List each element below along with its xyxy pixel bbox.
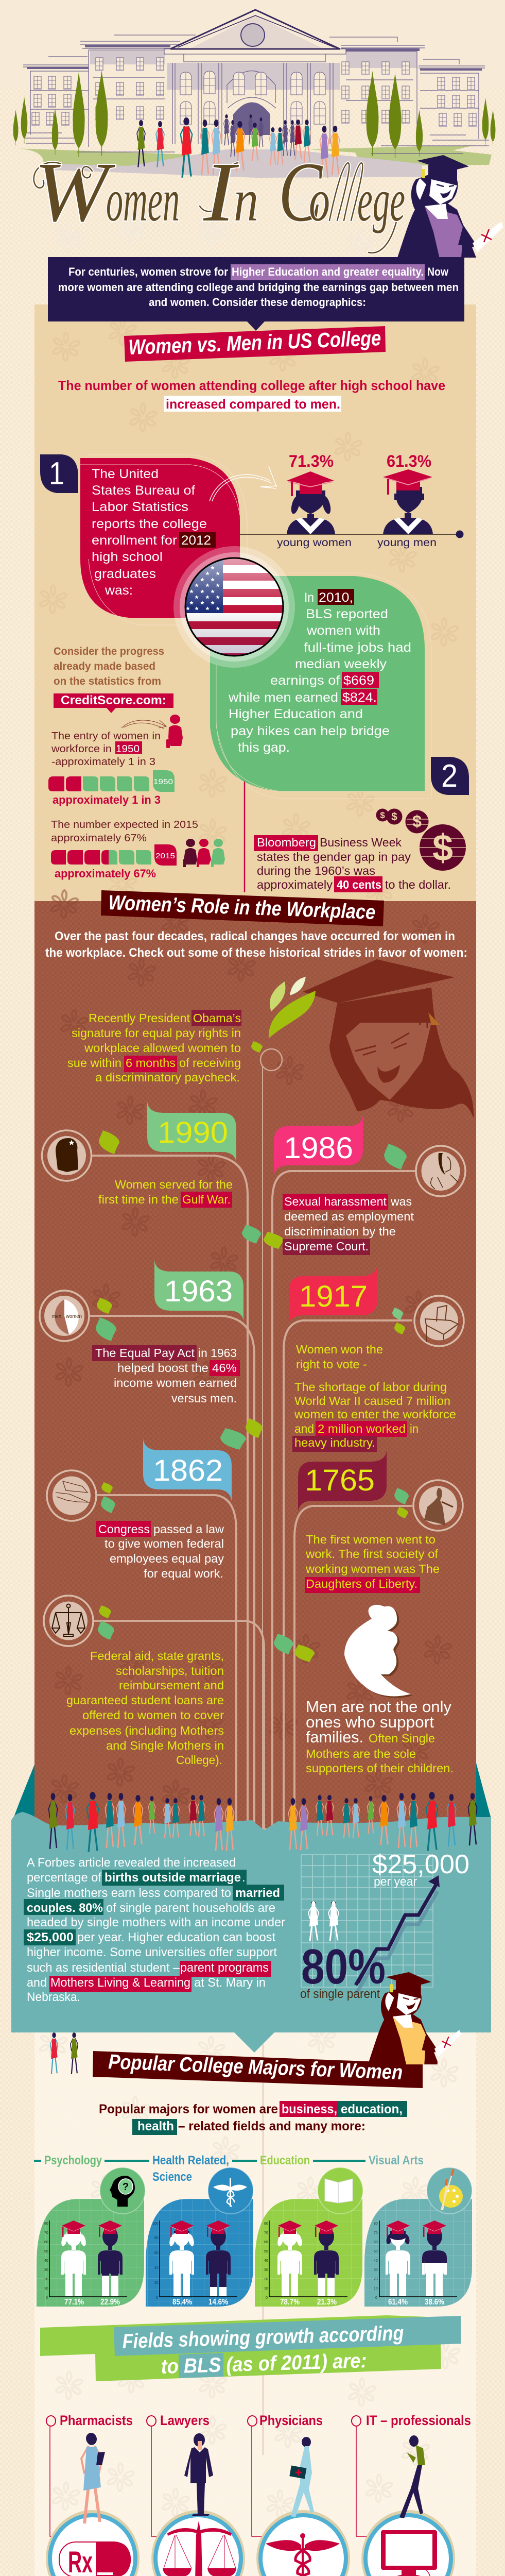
figures: [386, 2221, 447, 2296]
bar axis: 50: [264, 2250, 268, 2253]
bar axis: [44, 2221, 127, 2300]
timeline: 1990: Gulf War.: [182, 1193, 231, 1206]
heading: fields showing growth: to BLS (as of 2011) are:: [161, 2349, 367, 2378]
icon: dollar coins: $: [380, 810, 385, 820]
text: Bloomberg gender gap: states the gender gap in pay: [257, 850, 411, 863]
major headings row: Psychology: [44, 2154, 102, 2167]
bar axis: 40: [264, 2259, 268, 2263]
bar axis: 20: [154, 2281, 159, 2285]
text: workplace intro: [45, 929, 467, 960]
panel 2: earnings: $824.: [342, 690, 377, 705]
icon: money in hand: [47, 1470, 96, 1521]
timeline: 1917: 1917: [299, 1280, 368, 1313]
panel 2: earnings: BLS reported: [306, 607, 388, 621]
timeline: 1963: 1963: [164, 1275, 233, 1308]
bar axis: 10: [264, 2287, 268, 2291]
title graduate illustration: [396, 155, 503, 265]
text: Obama equal pay: of receiving: [179, 1056, 241, 1070]
text: Obama equal pay: signature for equal pay rights in: [72, 1026, 241, 1040]
icon: US flag: [173, 546, 295, 668]
arrow: to graduates: [210, 466, 277, 501]
text: federal aid: [66, 1649, 224, 1767]
subheading: number of women attending: The number of women attending college after high school have: [58, 378, 445, 393]
major headings row: [34, 2154, 424, 2184]
figures: [276, 2221, 339, 2296]
timeline: 1862: passed a law: [153, 1522, 224, 1536]
text: Bloomberg gender gap: Bloomberg: [257, 836, 316, 849]
bar axis: 20: [44, 2278, 48, 2281]
panel 2: earnings: Higher Education and: [229, 707, 363, 721]
bar axis: 60: [154, 2251, 159, 2255]
icon: dollar coins: [376, 809, 466, 871]
bar axis: 0: [156, 2296, 158, 2300]
panel: psychology: 22.9%: [100, 2298, 120, 2307]
two students walking: [50, 2032, 78, 2074]
text: Forbes article: Mothers Living & Learning: [50, 1976, 190, 1990]
major headings row: Health Related,: [152, 2154, 229, 2167]
text: Forbes article: [24, 1856, 285, 2004]
chart: young women vs young men: young men: [377, 537, 437, 549]
timeline: 1862: employees equal pay: [110, 1552, 224, 1565]
major headings row: Visual Arts: [369, 2154, 424, 2167]
panel 2: earnings: pay hikes can help bridge: [231, 724, 390, 738]
text: Bloomberg gender gap: 40 cents: [337, 878, 381, 891]
panel: single parents: [11, 1763, 491, 2053]
stat: women in workforce 1950: The entry of women in: [51, 731, 161, 742]
timeline: 1862: [47, 1438, 232, 1580]
bar axis: 60: [374, 2241, 378, 2244]
text: Obama equal pay: sue within: [67, 1056, 121, 1070]
title: o: [309, 166, 330, 234]
panel 2: earnings: $669: [343, 673, 374, 688]
field: lawyers: Lawyers: [160, 2413, 210, 2428]
panel 1: college enrollment: reports the college: [92, 517, 207, 531]
bar axis: 0: [46, 2296, 48, 2300]
text: Forbes article: and: [27, 1976, 47, 1990]
title: I: [203, 145, 239, 239]
text: federal aid: College).: [176, 1753, 222, 1767]
chart: income growth: of single parent: [300, 1987, 380, 2001]
panel 1: college enrollment: States Bureau of: [92, 483, 195, 498]
heading: women vs men: Women vs. Men in US College: [128, 326, 381, 359]
text: workplace intro: the workplace. Check out some of these historical strides in favor of women:: [45, 946, 467, 960]
timeline: 1765: Daughters of Liberty.: [306, 1577, 417, 1590]
text: Forbes article: such as residential student –: [27, 1961, 180, 1975]
panel 1: college enrollment: enrollment for: [92, 533, 177, 548]
stat: women in workforce 2015: 2015: [155, 852, 175, 860]
icon: men women pie: [40, 1291, 89, 1341]
title: W: [34, 145, 115, 239]
bar axis: 60: [264, 2241, 268, 2244]
timeline: 1917: The shortage of labor during: [294, 1380, 447, 1394]
timeline: 1986: 1986: [284, 1131, 353, 1165]
timeline: 1963: income women earned: [114, 1376, 237, 1389]
timeline: 1986: discrimination by the: [284, 1225, 396, 1238]
icon: scales of justice: [44, 1596, 93, 1646]
intro callout box: more women are attending college and bridging the earnings gap between men: [58, 281, 459, 294]
text: federal aid: scholarships, tuition: [116, 1664, 224, 1677]
title: omen: [106, 166, 180, 234]
stat: women in workforce 1950: -approximately 1 in 3: [51, 756, 155, 768]
timeline: 1990: Women served for the: [115, 1178, 233, 1191]
panel 1: college enrollment: Labor Statistics: [92, 500, 188, 514]
panel: psychology: 77.1%: [64, 2298, 84, 2307]
stat: women in workforce 1950: workforce in: [51, 743, 112, 755]
stat: women in workforce 1950: [48, 731, 175, 806]
text: federal aid: Federal aid, state grants,: [90, 1649, 224, 1663]
chart: income growth: 80%: [301, 1939, 386, 1994]
bar axis: 30: [374, 2268, 378, 2272]
bar axis: 0: [266, 2296, 268, 2300]
text: Obama equal pay: Recently President: [89, 1011, 190, 1025]
icon: soldier woman: [42, 1130, 92, 1181]
bar axis: 80: [44, 2222, 48, 2226]
title: [34, 145, 405, 253]
text: federal aid: expenses (including Mothers: [69, 1724, 224, 1737]
bar axis: 50: [44, 2250, 48, 2253]
timeline: 1917: and: [294, 1422, 314, 1435]
text: Forbes article: parent programs: [180, 1961, 269, 1975]
icon: dollar coins: $: [412, 812, 422, 831]
text: federal aid: reimbursement and: [119, 1679, 224, 1692]
bar axis: 100: [152, 2222, 159, 2226]
heading: fields showing growth: Fields showing growth according: [122, 2322, 404, 2353]
heading: popular college majors: Popular College Majors for Women: [108, 2050, 403, 2084]
chart: young women vs young men: young women: [277, 537, 352, 549]
chart: income growth: [300, 1850, 469, 2001]
bar axis: [374, 2221, 457, 2300]
icon: head with question mark: [110, 2176, 135, 2207]
bar axis: [152, 2221, 237, 2300]
timeline: 1862: 1862: [153, 1454, 223, 1487]
panel: workplace background: [34, 901, 476, 1828]
text: Forbes article: $25,000: [27, 1930, 74, 1944]
text: Bloomberg gender gap: Business Week: [320, 836, 402, 849]
timeline: 1917: in: [410, 1422, 419, 1435]
leaves: [96, 977, 409, 1662]
figures: [60, 2221, 123, 2296]
field: pharmacists: Pharmacists: [60, 2413, 133, 2428]
timeline: 1765: The first women went to: [306, 1533, 436, 1546]
text: Forbes article: at St. Mary in: [194, 1976, 266, 1990]
timeline: 1963: 46%: [212, 1361, 237, 1375]
badge 2: 2: [441, 758, 458, 794]
field: physicians: Physicians: [259, 2413, 323, 2428]
intro callout box: [48, 257, 464, 331]
panel: health: 14.6%: [208, 2298, 228, 2307]
major headings row: Science: [152, 2170, 192, 2184]
stat: women in workforce 1950: 1950: [153, 777, 173, 786]
field: IT professionals: [352, 2413, 471, 2576]
text: Forbes article: percentage of: [27, 1871, 101, 1885]
intro callout box: For centuries, women strove for: [68, 265, 228, 278]
figure: IT professional: [399, 2435, 425, 2518]
text: Bloomberg gender gap: approximately: [257, 878, 333, 891]
panel 1: college enrollment: 2012: [181, 533, 211, 548]
icon: mother and child silhouette: [344, 1605, 413, 1698]
timeline: 1862: to give women federal: [105, 1537, 224, 1550]
stats: CreditScore progress intro: on the statistics from: [54, 675, 161, 687]
bar axis: 30: [44, 2268, 48, 2272]
chart: young women vs young men: 61.3%: [387, 452, 431, 470]
timeline: 1986: was: [390, 1195, 412, 1208]
stat: women in workforce 2015: approximately 67%: [55, 867, 156, 880]
badge 1: [40, 454, 78, 493]
crowd band: [48, 1792, 477, 1852]
heading: women's role in the workplace: Women’s Role in the Workplace: [108, 891, 376, 924]
timeline: 1765: work. The first society of: [305, 1547, 439, 1561]
panel 2: earnings: while men earned: [228, 690, 338, 705]
panel 1: college enrollment: high school: [92, 550, 163, 564]
text: Forbes article: higher income. Some universities offer support: [27, 1945, 277, 1959]
title: n: [234, 166, 258, 234]
bar axis: 40: [44, 2259, 48, 2263]
text: Forbes article: couples. 80%: [27, 1901, 103, 1915]
icon: palette and brushes: [439, 2169, 463, 2210]
subheading: number of women attending: increased compared to men.: [166, 396, 340, 412]
timeline: 1862: Congress: [98, 1522, 150, 1536]
icon: dollar coins: $: [391, 811, 397, 823]
icon: men women pie: women: [65, 1314, 82, 1319]
figure: physician: [289, 2437, 314, 2517]
icon: young woman: [287, 471, 335, 534]
timeline: 1917: women to enter the workforce: [294, 1408, 456, 1421]
bar axis: 30: [264, 2268, 268, 2272]
panel 1: college enrollment: [40, 454, 247, 625]
intro callout box: Now: [427, 265, 449, 278]
text: federal aid: and Single Mothers in: [106, 1739, 224, 1752]
stat: women in workforce 1950: 1950: [116, 743, 140, 755]
text: Obama equal pay: [67, 1010, 241, 1084]
timeline: 1862: for equal work.: [144, 1567, 223, 1580]
bar axis: 70: [374, 2231, 378, 2235]
chart: young women vs young men: 71.3%: [289, 452, 334, 470]
text: men are not the only ones: families.: [306, 1728, 363, 1746]
text: Bloomberg gender gap: during the 1960’s was: [257, 864, 375, 877]
subheading: number of women attending: [58, 378, 445, 412]
stats: CreditScore progress intro: already made based: [54, 660, 155, 672]
stats: CreditScore progress intro: Consider the progress: [54, 646, 164, 657]
field: lawyers: [147, 2413, 245, 2576]
text: men are not the only ones: ones who support: [306, 1713, 434, 1731]
bar axis: 40: [154, 2266, 159, 2270]
bar axis: 10: [44, 2287, 48, 2291]
title: C: [278, 145, 323, 239]
bar axis: 80: [154, 2236, 159, 2240]
timeline: 1917: heavy industry.: [294, 1436, 375, 1449]
icon: harassment: [416, 1146, 465, 1196]
badge 1: 1: [49, 456, 64, 492]
bar axis: 70: [264, 2231, 268, 2235]
icon: caduceus: [213, 2178, 247, 2207]
icon: three women: [183, 839, 225, 867]
panel: health: [146, 2167, 253, 2307]
timeline: 1986: [274, 1115, 465, 1255]
text: Forbes article: Nebraska.: [27, 1990, 80, 2004]
text: Bloomberg gender gap: to the dollar.: [385, 878, 451, 891]
text: men are not the only ones: Mothers are the sole: [306, 1747, 416, 1760]
figure: lawyer: [184, 2433, 213, 2516]
timeline: 1765: 1765: [305, 1464, 375, 1497]
text: workplace intro: Over the past four decades, radical changes have occurred for women in: [55, 929, 455, 943]
timeline: 1765: [298, 1450, 463, 1593]
panel: education: 78.7%: [280, 2298, 300, 2307]
text: popular majors: Popular majors for women are: [99, 2102, 278, 2116]
chart: income growth: $25,000: [372, 1850, 469, 1879]
text: Forbes article: headed by single mothers with an income under: [27, 1916, 285, 1929]
major headings row: Education: [260, 2154, 310, 2167]
stat: women in workforce 1950: approximately 1 in 3: [53, 793, 161, 806]
bar axis: 80: [374, 2222, 378, 2226]
icon: Rx pill: [59, 2542, 130, 2576]
text: popular majors: – related fields and many more:: [178, 2119, 365, 2133]
panel: visual arts: 61.4%: [388, 2298, 408, 2307]
timeline: 1986: deemed as employment: [284, 1210, 414, 1223]
text: Obama equal pay: a discriminatory paycheck.: [95, 1071, 240, 1084]
illustration: college building with students: [11, 10, 495, 179]
timeline: 1963: [40, 1260, 243, 1405]
intro callout box: Higher Education and greater equality.: [232, 265, 424, 278]
icon: men women pie: men: [52, 1314, 61, 1319]
panel: visual arts: 38.6%: [425, 2298, 444, 2307]
badge 2: [431, 757, 469, 795]
figures: [168, 2221, 231, 2296]
bar axis: 20: [374, 2278, 378, 2281]
bar axis: 0: [375, 2296, 377, 2300]
timeline: 1963: helped boost the: [117, 1361, 208, 1375]
icon: dollar coins: $: [432, 827, 453, 869]
heading: fields showing growth: [40, 2315, 461, 2381]
icon: woman at work 1950: [121, 715, 183, 748]
panel 1: college enrollment: was:: [105, 583, 133, 598]
bar axis: 50: [374, 2250, 378, 2253]
bar axis: 40: [374, 2259, 378, 2263]
bar axis: 10: [374, 2287, 378, 2291]
panel 2: earnings: this gap.: [238, 740, 290, 755]
text: men are not the only ones: supporters of their children.: [306, 1761, 454, 1775]
panel 2: earnings: earnings of: [270, 673, 340, 688]
panel 1: college enrollment: The United: [92, 467, 159, 481]
timeline: 1986: Sexual harassment: [284, 1195, 387, 1208]
timeline: 1917: 2 million worked: [318, 1422, 406, 1435]
trees: [13, 71, 495, 158]
panel: psychology: [37, 2167, 145, 2307]
text: Forbes article: .: [242, 1871, 246, 1885]
icon: young man: [383, 469, 433, 534]
text: federal aid: offered to women to cover: [82, 1708, 224, 1722]
panel 2: earnings: In: [304, 590, 314, 605]
icon: computer: [381, 2530, 437, 2576]
stats: CreditScore progress intro: [54, 646, 173, 713]
panel 1: college enrollment: graduates: [94, 567, 156, 581]
bar axis: 70: [44, 2231, 48, 2235]
timeline: 1917: Women won the: [296, 1343, 383, 1356]
illustration: faded graduate head: [303, 959, 474, 1118]
text: popular majors: [99, 2101, 407, 2135]
panel: education: 21.3%: [317, 2298, 337, 2307]
panel 2: earnings: full-time jobs had: [304, 640, 411, 655]
text: Obama equal pay: 6 months: [126, 1056, 176, 1070]
stat: women in workforce 2015: The number expected in 2015: [51, 819, 198, 831]
panel 2: earnings: [210, 573, 469, 799]
stat: women in workforce 2015: approximately 67%: [51, 833, 147, 844]
icon: colonial woman: [413, 1480, 463, 1531]
timeline: 1990: [42, 1101, 236, 1208]
text: popular majors: business,: [282, 2102, 337, 2116]
intro callout box: and women. Consider these demographics:: [149, 296, 366, 309]
panel: women vs men background: [34, 304, 476, 901]
panel 2: earnings: 2010,: [319, 590, 353, 605]
timeline: 1765: working women was The: [305, 1562, 440, 1575]
timeline: 1986: Supreme Court.: [284, 1240, 369, 1253]
text: Forbes article: Single mothers earn less compared to: [27, 1886, 231, 1900]
text: Obama equal pay: Obama’s: [193, 1011, 241, 1025]
text: men are not the only ones: Men are not the only: [306, 1698, 451, 1716]
field: IT professionals: IT – professionals: [366, 2413, 471, 2428]
icon: open book: [325, 2179, 353, 2203]
timeline stems: [90, 1049, 416, 1830]
text: federal aid: guaranteed student loans are: [66, 1693, 224, 1707]
bar axis: 80: [264, 2222, 268, 2226]
text: men are not the only ones: [306, 1698, 454, 1775]
field: pharmacists: [46, 2413, 140, 2576]
text: Forbes article: births outside marriage: [105, 1871, 241, 1885]
timeline: 1917: right to vote -: [296, 1358, 367, 1371]
text: men are not the only ones: Often Single: [369, 1732, 435, 1745]
crowd of students: [137, 114, 340, 179]
stat: women in workforce 2015: [51, 819, 225, 880]
panel: education: [255, 2167, 363, 2307]
panel 2: earnings: women with: [306, 623, 380, 638]
icon: ballot box: [414, 1296, 464, 1346]
text: Forbes article: married: [235, 1886, 280, 1900]
panel: visual arts: [364, 2167, 472, 2307]
field: physicians: [248, 2413, 350, 2576]
timeline: 1990: 1990: [158, 1116, 228, 1149]
timeline: 1963: in 1963: [198, 1346, 237, 1360]
bar axis: 60: [44, 2241, 48, 2244]
text: Forbes article: of single parent households are: [106, 1901, 275, 1915]
graduate in teal panel: [368, 1972, 461, 2068]
timeline: 1917: World War II caused 7 million: [294, 1394, 450, 1408]
stats: CreditScore progress intro: CreditScore.com:: [61, 693, 166, 707]
text: Obama equal pay: workplace allowed women to: [84, 1041, 241, 1055]
icon: scales: [163, 2521, 236, 2576]
icon: head with question mark: ?: [123, 2181, 129, 2193]
bar axis: [264, 2221, 347, 2300]
timeline: 1963: The Equal Pay Act: [95, 1346, 195, 1360]
timeline: 1917: [289, 1265, 464, 1452]
text: popular majors: health: [137, 2119, 174, 2133]
text: popular majors: education,: [341, 2102, 403, 2116]
panel: health: 85.4%: [172, 2298, 192, 2307]
text: Forbes article: per year. Higher education can boost: [77, 1930, 275, 1944]
title: ege: [357, 166, 405, 234]
chart: income growth: per year: [374, 1875, 417, 1889]
bar axis: 20: [264, 2278, 268, 2281]
panel 2: earnings: median weekly: [295, 657, 387, 671]
timeline: 1990: first time in the: [98, 1193, 179, 1206]
icon: caduceus: [266, 2533, 340, 2576]
chart: young women vs young men: [240, 452, 463, 549]
text: Forbes article: A Forbes article revealed the increased: [27, 1856, 236, 1870]
text: Bloomberg gender gap: [254, 835, 451, 892]
timeline: 1963: versus men.: [171, 1392, 237, 1405]
